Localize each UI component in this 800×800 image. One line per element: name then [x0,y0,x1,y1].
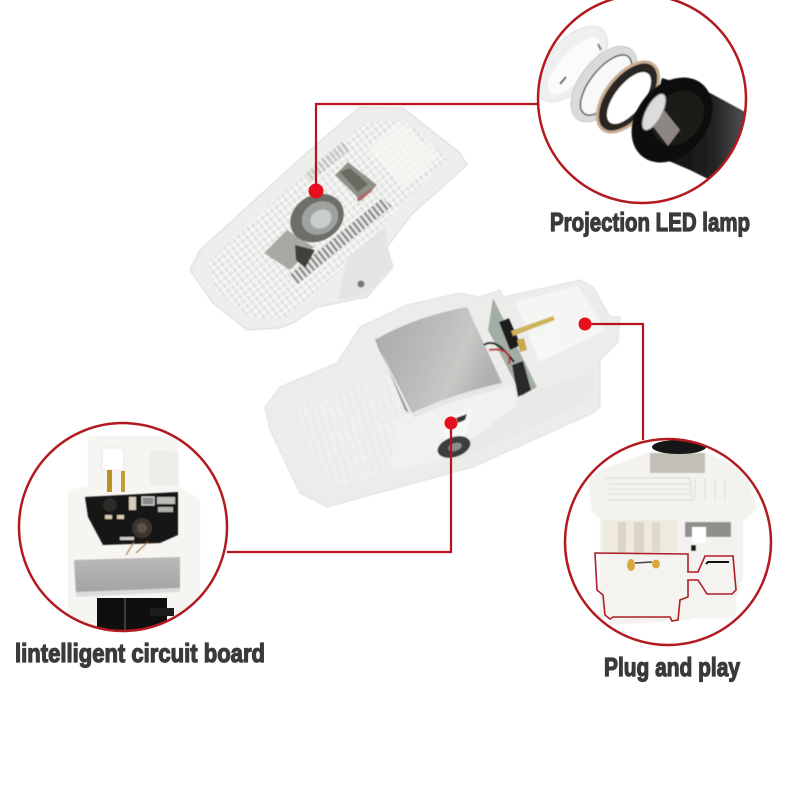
gold pins [511,316,562,360]
circuit board and wires [484,298,537,397]
circle: plug and play detail [565,439,771,645]
silver block [74,557,180,597]
label: intelligent circuit board: lintelligent circuit board [15,638,265,668]
leader line: lens to projection lamp [308,104,538,198]
circle: intelligent circuit board detail [19,423,227,640]
sticker with logo [435,408,473,462]
lens mount [264,184,353,270]
small circuit part [335,162,377,201]
red plug outline [595,553,736,621]
icon: exploded lenses [540,26,661,134]
white connector body [68,436,200,640]
black cylinder [97,598,174,630]
label: projection LED lamp: Projection LED lamp [550,207,750,237]
product: top lamp with lens [190,107,467,330]
circuit board [85,492,178,555]
leader line: connector to plug and play [578,318,643,440]
black lens top [652,440,706,454]
circle: projection LED lamp detail [536,0,748,204]
label: plug and play: Plug and play [604,652,740,682]
icon: black lamp barrel [630,76,744,179]
connector body [588,452,757,625]
product: lower lamp with metal cover [265,280,620,507]
leader line: board to circuit detail [227,416,458,552]
gold contacts [627,559,660,571]
black slot [706,562,729,564]
metal cover [375,307,504,418]
gold pins [107,470,125,492]
